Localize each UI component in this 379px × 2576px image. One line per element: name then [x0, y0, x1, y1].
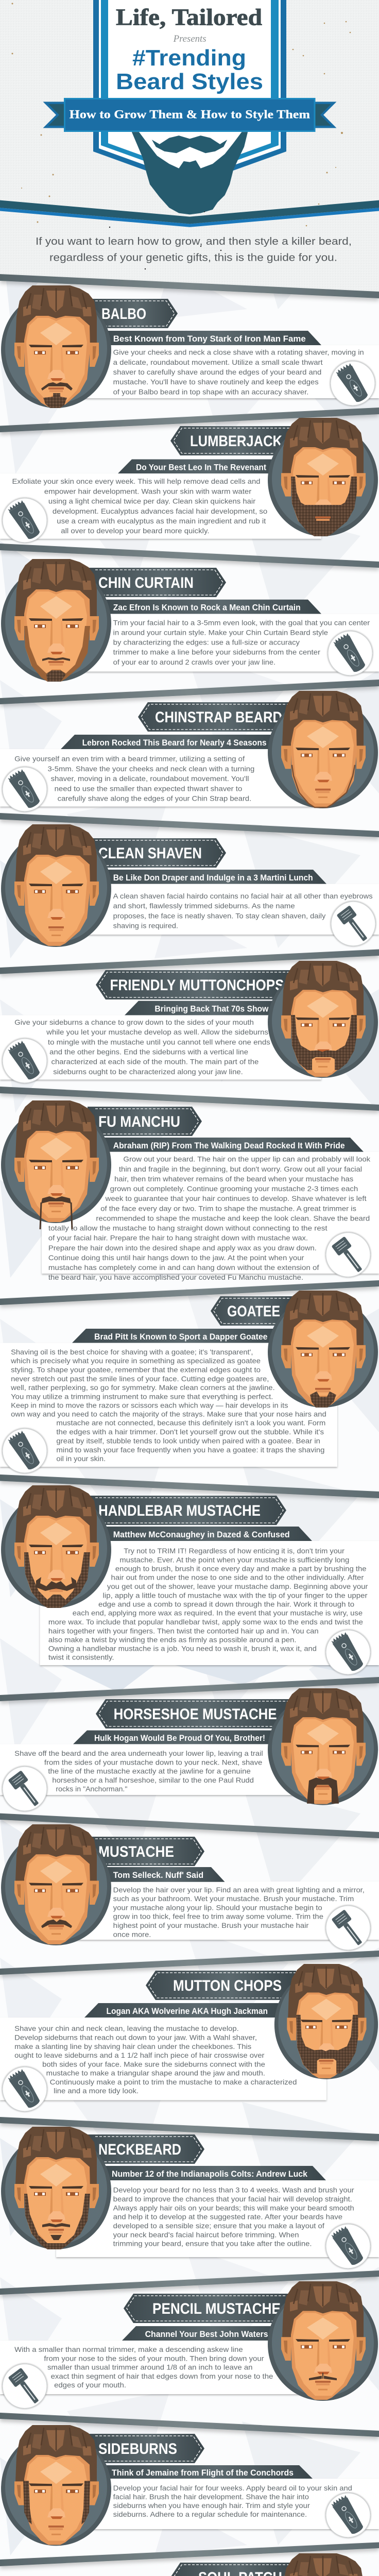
body text: Give your cheeks and neck a close shave with a rotating shaver, moving in: [113, 348, 364, 357]
title line 2: Beard Styles: [116, 69, 263, 94]
name ribbon: FU MANCHU: [98, 1113, 180, 1130]
body text: hair out from under the nose to one side and to the other individually. After: [111, 1573, 364, 1582]
body text: mind to wash your face frequently when you have a goatee: it traps the shaving: [56, 1446, 324, 1454]
body text: ought to leave sideburns and a 1 1/2 half inch piece of hair crosswise over: [14, 2051, 265, 2059]
brand name: Life, Tailored: [116, 4, 262, 30]
body text: Shave off the beard and the area underneath your lower lip, leaving a trail: [14, 1749, 263, 1757]
subheading: [98, 2465, 313, 2479]
text card: [0, 2341, 321, 2394]
body text: your mustache along your lip. Should your mustache begin to: [113, 1903, 322, 1911]
subheading: Do Your Best Leo In The Revenant: [136, 463, 266, 472]
body text: in around your curtain style. Make your Chin Curtain Beard style: [113, 629, 328, 637]
panel: balbo: [1, 285, 379, 408]
body text: Try not to TRIM IT! Regardless of how enticing it is, don't trim your: [124, 1547, 344, 1555]
body text: mustache. Ever. At the point when your mustache is sufficiently long: [119, 1555, 349, 1564]
subheading: [125, 1001, 288, 1015]
icon: trimmer: [3, 498, 47, 543]
body text: of your ear to around 2 crawls over your jaw line.: [113, 658, 275, 666]
body text: Give your sideburns a chance to grow down to the sides of your mouth: [14, 1018, 254, 1026]
name ribbon: [88, 2134, 204, 2164]
body text: thin and fragile in the beginning, but don't worry. Grow out all your facial: [119, 1165, 362, 1173]
body text: also make a twist by winding the ends as firmly as possible around a pen.: [48, 1635, 297, 1643]
icon: trimmer: [326, 2224, 370, 2268]
body text: development. Eucalyptus advances facial hair development, so: [53, 507, 267, 515]
text card: [51, 2479, 379, 2529]
name ribbon: FRIENDLY MUTTONCHOPS: [110, 977, 284, 994]
body text: of your Balbo beard in top shape with an accuracy shaver.: [113, 388, 308, 396]
name ribbon: [88, 1496, 286, 1525]
portrait: mustache: [1, 1824, 111, 1945]
body text: [113, 2484, 352, 2518]
body text: such as your bathroom. Wet your mustache. Brush your mustache. Trim: [113, 1894, 354, 1903]
body text: totally to allow the mustache to hang straight down without connecting to the rest: [48, 1224, 328, 1232]
body text: the beard hair, you have accomplished your coveted Fu Manchu mustache.: [48, 1273, 303, 1281]
text card: [51, 614, 379, 672]
body text: Develop the hair over your lip. Find an area with great lighting and a mirror,: [113, 1886, 365, 1894]
body text: [113, 618, 370, 666]
portrait: horseshoe: [268, 1688, 378, 1805]
name ribbon: [88, 2434, 204, 2463]
portrait: goatee: [268, 1291, 378, 1408]
subheading: Best Known from Tony Stark of Iron Man Fame: [113, 334, 306, 344]
panel: goatee: [0, 1291, 378, 1473]
name ribbon: [88, 1837, 204, 1866]
portrait: mutton chops: [274, 1964, 378, 2079]
body text: developed to a sensible size; ensure that you make a layout of: [113, 2222, 324, 2230]
body text: Shave your chin and neck clean, leaving the mustache to develop.: [14, 2024, 239, 2032]
subheading: [98, 2166, 326, 2180]
name ribbon: [138, 702, 294, 732]
body text: Owning a handlebar mustache is a job. You need to wash it, brush it, wax it, and: [48, 1645, 317, 1653]
panel: friendly muttonchops: [0, 961, 378, 1083]
body text: proposes, the face is neatly shaven. To stay clean shaven, daily: [113, 911, 325, 920]
icon: trimmer: [326, 2493, 370, 2537]
name ribbon: [211, 1296, 294, 1326]
body text: well, rather perplexing, so go for symmetry. Make clean corners at the jawline.: [10, 1383, 275, 1392]
body text: the edges with a hair trimmer. Don't let yourself grow out the stubble. While it's: [56, 1428, 324, 1436]
text card: [0, 749, 321, 807]
portrait: lumberjack: [268, 418, 378, 536]
intro text: If you want to learn how to grow, and then style a killer beard,: [36, 236, 352, 247]
body text: while you let your mustache develop as well. Allow the sideburns: [46, 1028, 268, 1036]
body text: Continuously make a point to trim the mustache to make a characterized: [50, 2078, 297, 2086]
icon: razor: [331, 902, 375, 946]
subheading: [98, 331, 321, 345]
subheading: [118, 460, 288, 473]
body text: edges of your mouth.: [54, 2381, 126, 2389]
subheading: [98, 1527, 312, 1541]
name ribbon: NECKBEARD: [98, 2141, 181, 2158]
body text: [10, 1348, 326, 1463]
body text: styling. To shape your goatee, remember that the external edges ought to: [11, 1365, 261, 1374]
subheading: [84, 2003, 288, 2018]
body text: smaller than usual trimmer around 1/8 of an inch to leave an: [47, 2363, 252, 2371]
body text: twist it consistently.: [48, 1653, 114, 1662]
portrait: pencil mustache: [268, 2281, 378, 2401]
subheading: [98, 1138, 364, 1152]
subheading: Logan AKA Wolverine AKA Hugh Jackman: [106, 2006, 268, 2016]
icon: trimmer: [331, 361, 375, 405]
name ribbon: MUSTACHE: [98, 1843, 174, 1860]
name ribbon: GOATEE: [227, 1303, 280, 1320]
icon: trimmer: [328, 631, 372, 675]
body text: line and a more tidy look.: [54, 2087, 139, 2095]
body text: carefully shave along the edges of your Chin Strap beard.: [58, 794, 251, 803]
subheading: [98, 600, 321, 614]
text card: [0, 1744, 321, 1795]
name ribbon: [96, 970, 294, 999]
name ribbon: CHIN CURTAIN: [98, 574, 194, 591]
ribbon: subtitle: [43, 99, 337, 131]
portrait: clean shaven: [1, 824, 111, 947]
text card: [51, 345, 379, 398]
name ribbon: [88, 1107, 202, 1136]
subheading: [98, 870, 326, 884]
name ribbon: CLEAN SHAVEN: [98, 845, 202, 862]
panel: horseshoe mustache: [0, 1688, 378, 1811]
body text: empower hair development. Wash your skin with warm water: [44, 487, 252, 495]
body text: week to guarantee that your hair continues to develop. Shave whatever is left: [105, 1194, 367, 1202]
body text: beard to improve the chances that your facial hair will develop straight.: [113, 2195, 352, 2203]
name ribbon: [124, 2294, 294, 2323]
body text: enough to brush, brush it once every day and make a part by brushing the: [115, 1564, 367, 1572]
body text: Continue doing this until hair hangs down to the jaw. At the point when your: [48, 1253, 304, 1262]
ribbon: subtitle: How to Grow Them & How to Style Them: [70, 108, 310, 121]
body text: of the face every day or two. Trim to shape the mustache. A great trimmer is: [100, 1204, 356, 1212]
subheading: Matthew McConaughey in Dazed & Confused: [113, 1530, 290, 1539]
body text: lip, apply a little touch of mustache wax with the tip of your finger to the upper: [103, 1591, 368, 1599]
body text: trimmer to make a line before your sideburns from the center: [113, 648, 320, 656]
name ribbon: [170, 426, 294, 455]
subheading: Think of Jemaine from Flight of the Conchords: [112, 2468, 294, 2478]
panel: chinstrap beard: [0, 691, 378, 811]
body text: shaver, moving in a delicate, roundabout movement. You'll: [51, 774, 249, 783]
body text: mustache. You'll have to shave routinely and keep the edges: [113, 378, 319, 386]
text card: [40, 1541, 379, 1665]
panel: fu manchu: [1, 1100, 379, 1281]
body text: own way and you need to catch the majority of the strays. Make sure that your nose hairs and: [11, 1410, 326, 1418]
portrait: neckbeard: [1, 2127, 111, 2249]
name ribbon: LUMBERJACK: [190, 433, 282, 450]
body text: [113, 1886, 365, 1938]
text card: [0, 473, 321, 539]
body text: great by itself, stubble tends to look untidy when paired with a goatee. Bear in: [56, 1436, 320, 1445]
subheading: Lebron Rocked This Beard for Nearly 4 Seasons: [82, 738, 267, 748]
presents: Presents: [173, 33, 206, 44]
body text: mustache to make a triangular shape around the jaw and mouth.: [46, 2069, 265, 2077]
name ribbon: PENCIL MUSTACHE: [152, 2300, 281, 2317]
text card: [51, 1882, 379, 1940]
icon: razor: [326, 1232, 370, 1277]
header specks: [11, 3, 351, 269]
panel: pencil mustache: [0, 2281, 378, 2408]
body text: the line of the mustache exactly at the jawline for a genuine: [48, 1767, 251, 1775]
subheading: Tom Selleck. Nuff' Said: [113, 1870, 203, 1880]
subheading: [73, 1731, 288, 1744]
body text: Shaving oil is the best choice for shaving with a goatee; it's 'transparent',: [11, 1348, 253, 1356]
panel: clean shaven: [1, 824, 379, 947]
body text: With a smaller than normal trimmer, make a descending askew line: [14, 2345, 243, 2353]
panel: chin curtain: [1, 559, 379, 682]
body text: mustache has completely come in and can hang down without the extension of: [48, 1263, 319, 1272]
body text: shaver to carefully shave around the edges of your beard and: [113, 368, 321, 376]
body text: [113, 892, 373, 929]
text card: [0, 2018, 326, 2100]
body text: edge and use a comb to spread it down through the hair. Work it through to: [98, 1600, 354, 1608]
body text: to mingle with the mustache until you cannot tell where one ends: [48, 1038, 270, 1046]
body text: Keep in mind to move the razors or scissors each which way — hair develops in its: [11, 1401, 288, 1409]
intro text: [36, 236, 352, 264]
body text: Develop your facial hair for four weeks. Apply beard oil to your skin and: [113, 2484, 352, 2492]
portrait: soul patch: [268, 2553, 378, 2576]
body text: 3-5mm. Shave the your cheeks and neck clean with a turning: [47, 765, 254, 773]
body text: Always apply hair oils on your beards; this will make your beard smooth: [113, 2204, 354, 2212]
name ribbon: [88, 299, 178, 328]
body text: Grow out your beard. The hair on the upper lip can and probably will look: [123, 1155, 371, 1163]
body text: Develop sideburns that reach out down to your jaw. With a Wahl shaver,: [14, 2033, 257, 2042]
portrait: chin curtain: [1, 559, 111, 682]
body text: hair, then trim whatever remains of the beard when your mustache has: [114, 1175, 353, 1183]
body text: [48, 1155, 371, 1281]
body text: once more.: [113, 1930, 151, 1938]
name ribbon: [88, 568, 226, 597]
body text: highest point of your mustache. Brush your mustache hair: [113, 1921, 309, 1929]
subheading: Hulk Hogan Would Be Proud Of You, Brother!: [94, 1733, 265, 1743]
icon: trimmer: [326, 1630, 370, 1674]
body text: [12, 477, 267, 535]
text card: [0, 1015, 321, 1080]
body text: grown out completely. Continue grooming your mustache 2-3 times each: [110, 1184, 358, 1193]
body text: Prepare the hair down into the desired shape and apply wax as you draw down.: [48, 1244, 317, 1252]
body text: and short, flawlessly trimmed sideburns. As the name: [113, 902, 295, 910]
title line 1: #Trending: [132, 45, 246, 71]
body text: use a cream with eucalyptus as the main ingredient and rub it: [57, 517, 266, 525]
subheading: [72, 1329, 288, 1343]
icon: trimmer: [3, 1429, 47, 1473]
portrait: balbo: [1, 285, 111, 408]
icon: trimmer: [3, 1039, 47, 1083]
body text: a delicate, roundabout movement. Utilize a small scale thwart: [113, 358, 323, 366]
body text: from your nose to the sides of your mouth. Then bring down your: [44, 2354, 264, 2362]
name ribbon: [88, 838, 226, 868]
subheading: Zac Efron Is Known to Rock a Mean Chin Curtain: [113, 603, 301, 613]
body text: more wax. To include that popular handlebar twist, apply some wax to the ends and twist the: [48, 1618, 363, 1626]
body text: rocks in "Anchorman.": [56, 1785, 127, 1793]
panel: handlebar mustache: [1, 1485, 379, 1674]
body text: each end, applying more wax as required. In the event that your mustache is wiry, use: [73, 1608, 363, 1617]
panel: mustache: [1, 1824, 379, 1950]
body text: which is precisely what you require in something as specialized as goatee: [10, 1357, 261, 1365]
body text: Develop your beard for no less than 3 to 4 weeks. Wash and brush your: [113, 2186, 354, 2194]
body text: Exfoliate your skin once every week. This will help remove dead cells and: [12, 477, 261, 485]
header badge: [0, 0, 379, 227]
background facets: handlebar: [62, 1665, 379, 1692]
icon: razor: [326, 1906, 370, 1950]
icon: trimmer: [3, 2067, 47, 2111]
body text: both sides of your face. Make sure the sideburns connect with the: [42, 2060, 265, 2068]
body text: [14, 1018, 270, 1076]
body text: sideburns ought to be characterized along your jaw line.: [53, 1067, 243, 1076]
panel: neckbeard: [1, 2127, 379, 2268]
subheading: [122, 2326, 288, 2341]
intro text: regardless of your genetic gifts, this is the guide for you.: [49, 252, 337, 264]
portrait: handlebar: [1, 1485, 111, 1608]
text card: [51, 884, 379, 935]
body text: all over to develop your beard more quickly.: [61, 527, 210, 535]
subheading: Abraham (RIP) From The Walking Dead Rocked It With Pride: [113, 1141, 345, 1150]
name ribbon: HANDLEBAR MUSTACHE: [98, 1502, 261, 1519]
subheading: [61, 735, 288, 749]
name ribbon: CHINSTRAP BEARD: [155, 709, 282, 726]
name ribbon: SIDEBURNS: [98, 2441, 177, 2458]
body text: horseshoe or a half horseshoe, similar to the one Paul Rudd: [52, 1776, 254, 1784]
name ribbon: [96, 1699, 294, 1728]
body text: of your facial hair. Prepare the hair to hang straight down with mustache wax.: [48, 1234, 308, 1242]
shield: [93, 0, 286, 187]
body text: trimming your beard, ensure that you take after the outline.: [113, 2239, 312, 2247]
panel: mutton chops: [0, 1964, 378, 2111]
body text: sideburns. Adhere to a regular schedule for maintenance.: [113, 2510, 307, 2518]
text card: [56, 2180, 379, 2257]
body text: characterized at each side of the mouth. The main part of the: [51, 1058, 259, 1066]
body text: Give yourself an even trim with a beard trimmer, utilizing a setting of: [14, 755, 245, 763]
body text: [113, 348, 364, 396]
subheading: Channel Your Best John Waters: [145, 2329, 268, 2339]
portrait: fu manchu: [1, 1100, 111, 1229]
text card: [0, 1343, 337, 1467]
icon: trimmer: [3, 767, 47, 811]
body text: [14, 2345, 273, 2389]
body text: using a light chemical twice per day. Clean skin quickens hair: [48, 497, 256, 505]
name ribbon: BALBO: [101, 306, 146, 323]
panel: lumberjack: [0, 418, 378, 543]
name ribbon: [170, 2563, 294, 2576]
body text: oil in your skin.: [56, 1454, 106, 1463]
panel: soul patch: [0, 2553, 378, 2576]
body text: Trim your facial hair to a 3-5mm even look, with the goal that you can center: [113, 618, 370, 626]
body text: recommended to shape the mustache and keep the look clean. Shave the beard: [96, 1214, 370, 1222]
body text: [14, 2024, 297, 2095]
subheading: Number 12 of the Indianapolis Colts: Andrew Luck: [112, 2169, 307, 2179]
portrait: muttonchops: [268, 961, 378, 1078]
body text: hairs together with your fingers. Then twist the contorted hair up and in. You can: [48, 1626, 319, 1635]
body text: mustache are not connected, because this definitely isn't a look you want. Form: [56, 1419, 325, 1427]
subheading: [98, 1867, 225, 1882]
body text: sideburns when you have enough hair. Trim and style your: [113, 2501, 310, 2510]
body text: you get out of the shower, leave your mustache damp. Beginning above your: [107, 1582, 368, 1590]
beard and chevron: [0, 132, 379, 227]
subheading: Brad Pitt Is Known to Sport a Dapper Goatee: [94, 1332, 268, 1342]
icon: razor: [3, 2364, 47, 2408]
body text: exact thin segment of hair that edges down from your nose to the: [51, 2372, 273, 2380]
subheading: Bringing Back That 70s Show: [154, 1004, 269, 1014]
body text: [14, 1749, 263, 1793]
name ribbon: [146, 1971, 296, 2000]
body text: A clean shaven facial hairdo contains no facial hair at all other than eyebrows: [113, 892, 373, 900]
body text: need to use the smaller than expected thwart shaver to: [55, 784, 243, 792]
body text: and the other begins. End the sideburns with a vertical line: [49, 1048, 248, 1056]
body text: [113, 2186, 354, 2247]
text card: [42, 1152, 379, 1274]
body text: by characterizing the edges: use a full-size or accuracy: [113, 638, 300, 647]
panel: sideburns: [1, 2425, 379, 2546]
name ribbon: MUTTON CHOPS: [173, 1977, 282, 1994]
body text: make a slanting line by shaving hair clean under the cheekbones. This: [14, 2042, 251, 2050]
portrait: sideburns: [1, 2425, 111, 2546]
icon: razor: [3, 1767, 47, 1811]
portrait: chinstrap: [268, 691, 378, 808]
subheading: Be Like Don Draper and Indulge in a 3 Martini Lunch: [113, 873, 313, 883]
body text: [14, 755, 254, 803]
body text: never stretch out past the smile lines of your face. Cutting edge goatees are,: [11, 1375, 269, 1383]
body text: and help it to develop at the suggested rate. After your beards have: [113, 2212, 342, 2221]
body text: [48, 1547, 368, 1662]
name ribbon: HORSESHOE MUSTACHE: [114, 1706, 277, 1723]
body text: shaving is required.: [113, 921, 178, 929]
body text: from the sides of your mustache down to your neck. Next, shave: [44, 1758, 263, 1766]
body text: your neck beard's facial haircut before trimming. When: [113, 2230, 299, 2239]
body text: facial hair. Brush the hair development. Shave the hair into: [113, 2493, 309, 2501]
body text: You may utilize a trimming instrument to make sure that everything is perfect.: [11, 1392, 273, 1400]
body text: grow in too thick, feel free to trim away some volume. Trim the: [113, 1912, 323, 1921]
